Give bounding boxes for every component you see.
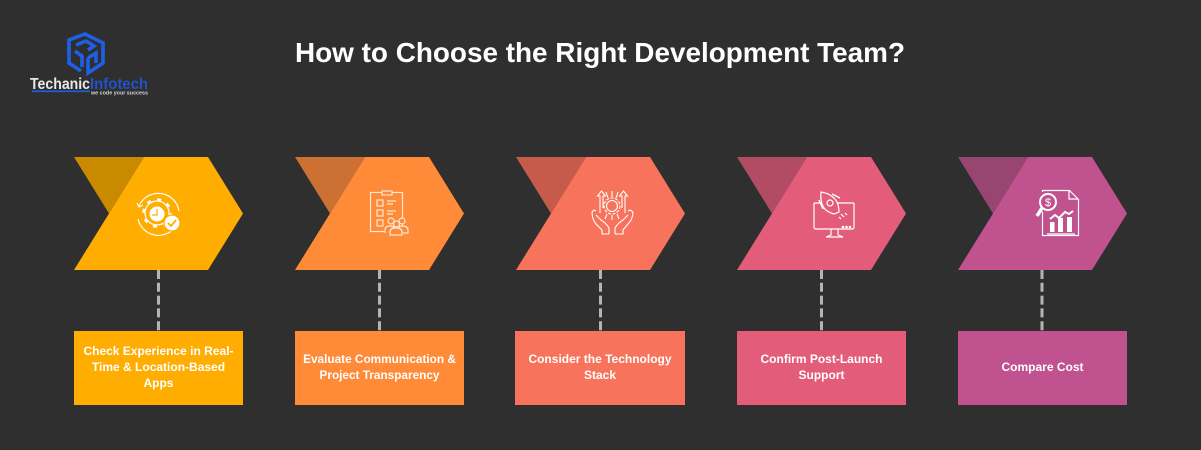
step 5 label [958, 331, 1127, 405]
logo: Techanic Infotech: Infotech [90, 76, 148, 93]
step 3 label [515, 331, 685, 405]
step 4 label: Support [798, 368, 844, 382]
step 1 label: Apps [143, 376, 173, 390]
step 3 label: Consider the Technology [528, 352, 672, 366]
step 4 label: Confirm Post-Launch [760, 352, 882, 366]
step 2 label [295, 331, 464, 405]
step 1 label: Time & Location-Based [92, 360, 225, 374]
step 3 label: Stack [584, 368, 616, 382]
logo: Techanic Infotech [30, 32, 148, 96]
step 1 label [74, 331, 243, 405]
logo: Techanic Infotech: we code your success [90, 90, 148, 96]
step 4 label [737, 331, 906, 405]
title: How to Choose the Right Development Team? [295, 37, 905, 68]
icon: financial report with magnifier: $ [1045, 197, 1051, 209]
step 5 label: Compare Cost [1001, 360, 1084, 374]
step 2 label: Evaluate Communication & [303, 352, 456, 366]
step 1 label: Check Experience in Real- [83, 344, 234, 358]
step 2 label: Project Transparency [319, 368, 439, 382]
logo: Techanic Infotech: Techanic [30, 76, 90, 93]
